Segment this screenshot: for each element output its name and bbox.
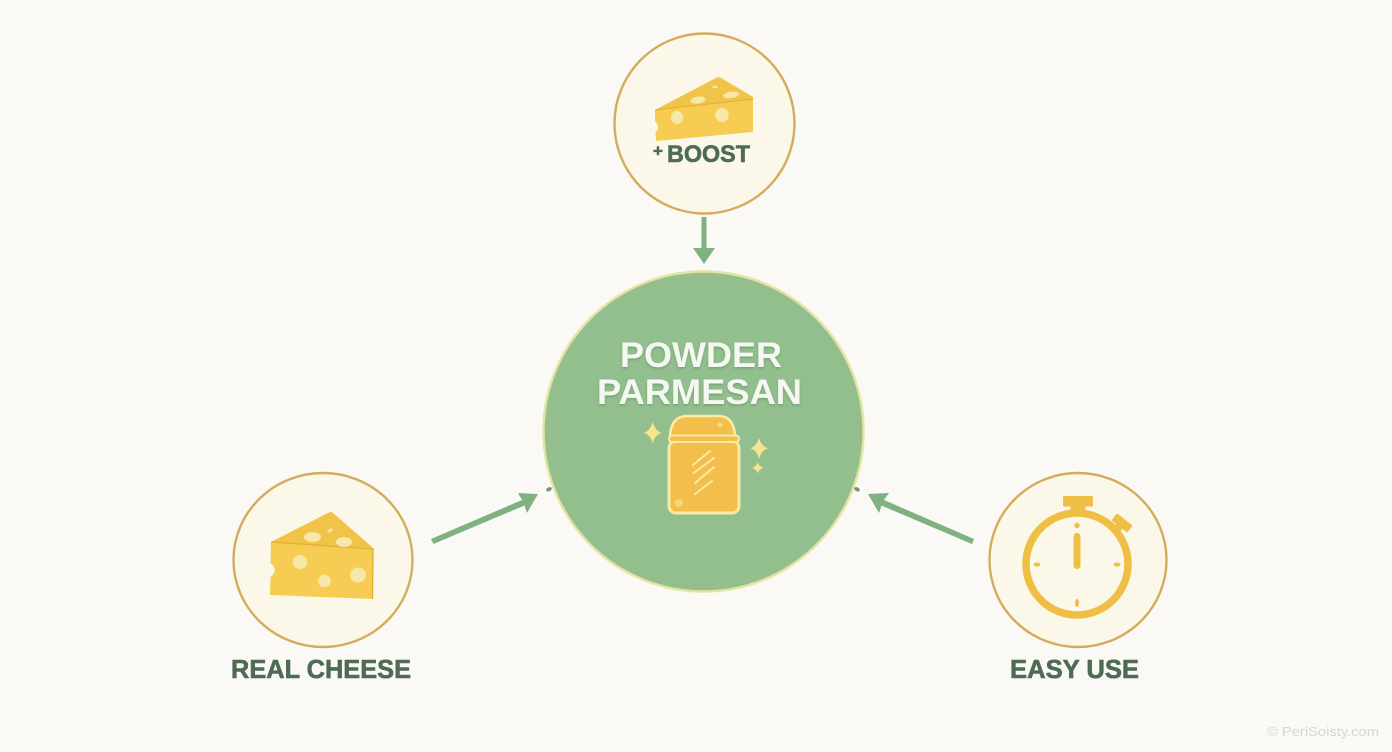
arrow: real cheese to centre	[431, 493, 538, 544]
panel: boost node	[614, 34, 794, 214]
easy use circle	[990, 473, 1166, 647]
heading: powder parmesan: PARMESAN	[597, 372, 802, 412]
panel: real cheese node	[234, 473, 412, 647]
boost circle	[614, 34, 794, 214]
label: +BOOST: +	[653, 142, 663, 160]
heading: powder parmesan	[597, 335, 802, 412]
connector dots	[545, 486, 861, 492]
panel: easy use node	[990, 473, 1166, 647]
label: +BOOST: BOOST	[667, 141, 750, 168]
label: easy use: EASY USE	[1010, 654, 1139, 684]
icon: shaker	[669, 416, 739, 513]
panel: centre circle	[544, 272, 864, 592]
heading: powder parmesan: POWDER	[620, 335, 782, 375]
icon: sparkles	[645, 423, 767, 473]
label: real cheese: REAL CHEESE	[231, 654, 411, 684]
watermark: © PeriSoisty.com	[1267, 725, 1379, 739]
arrow: boost to centre	[693, 217, 715, 264]
real cheese circle	[234, 473, 412, 647]
centre disc	[544, 272, 864, 592]
arrow: easy use to centre	[868, 493, 974, 544]
icon: cheese wedge (boost)	[655, 77, 753, 141]
icon: stopwatch	[1026, 496, 1133, 615]
icon: cheese wedge (real cheese)	[270, 512, 373, 599]
